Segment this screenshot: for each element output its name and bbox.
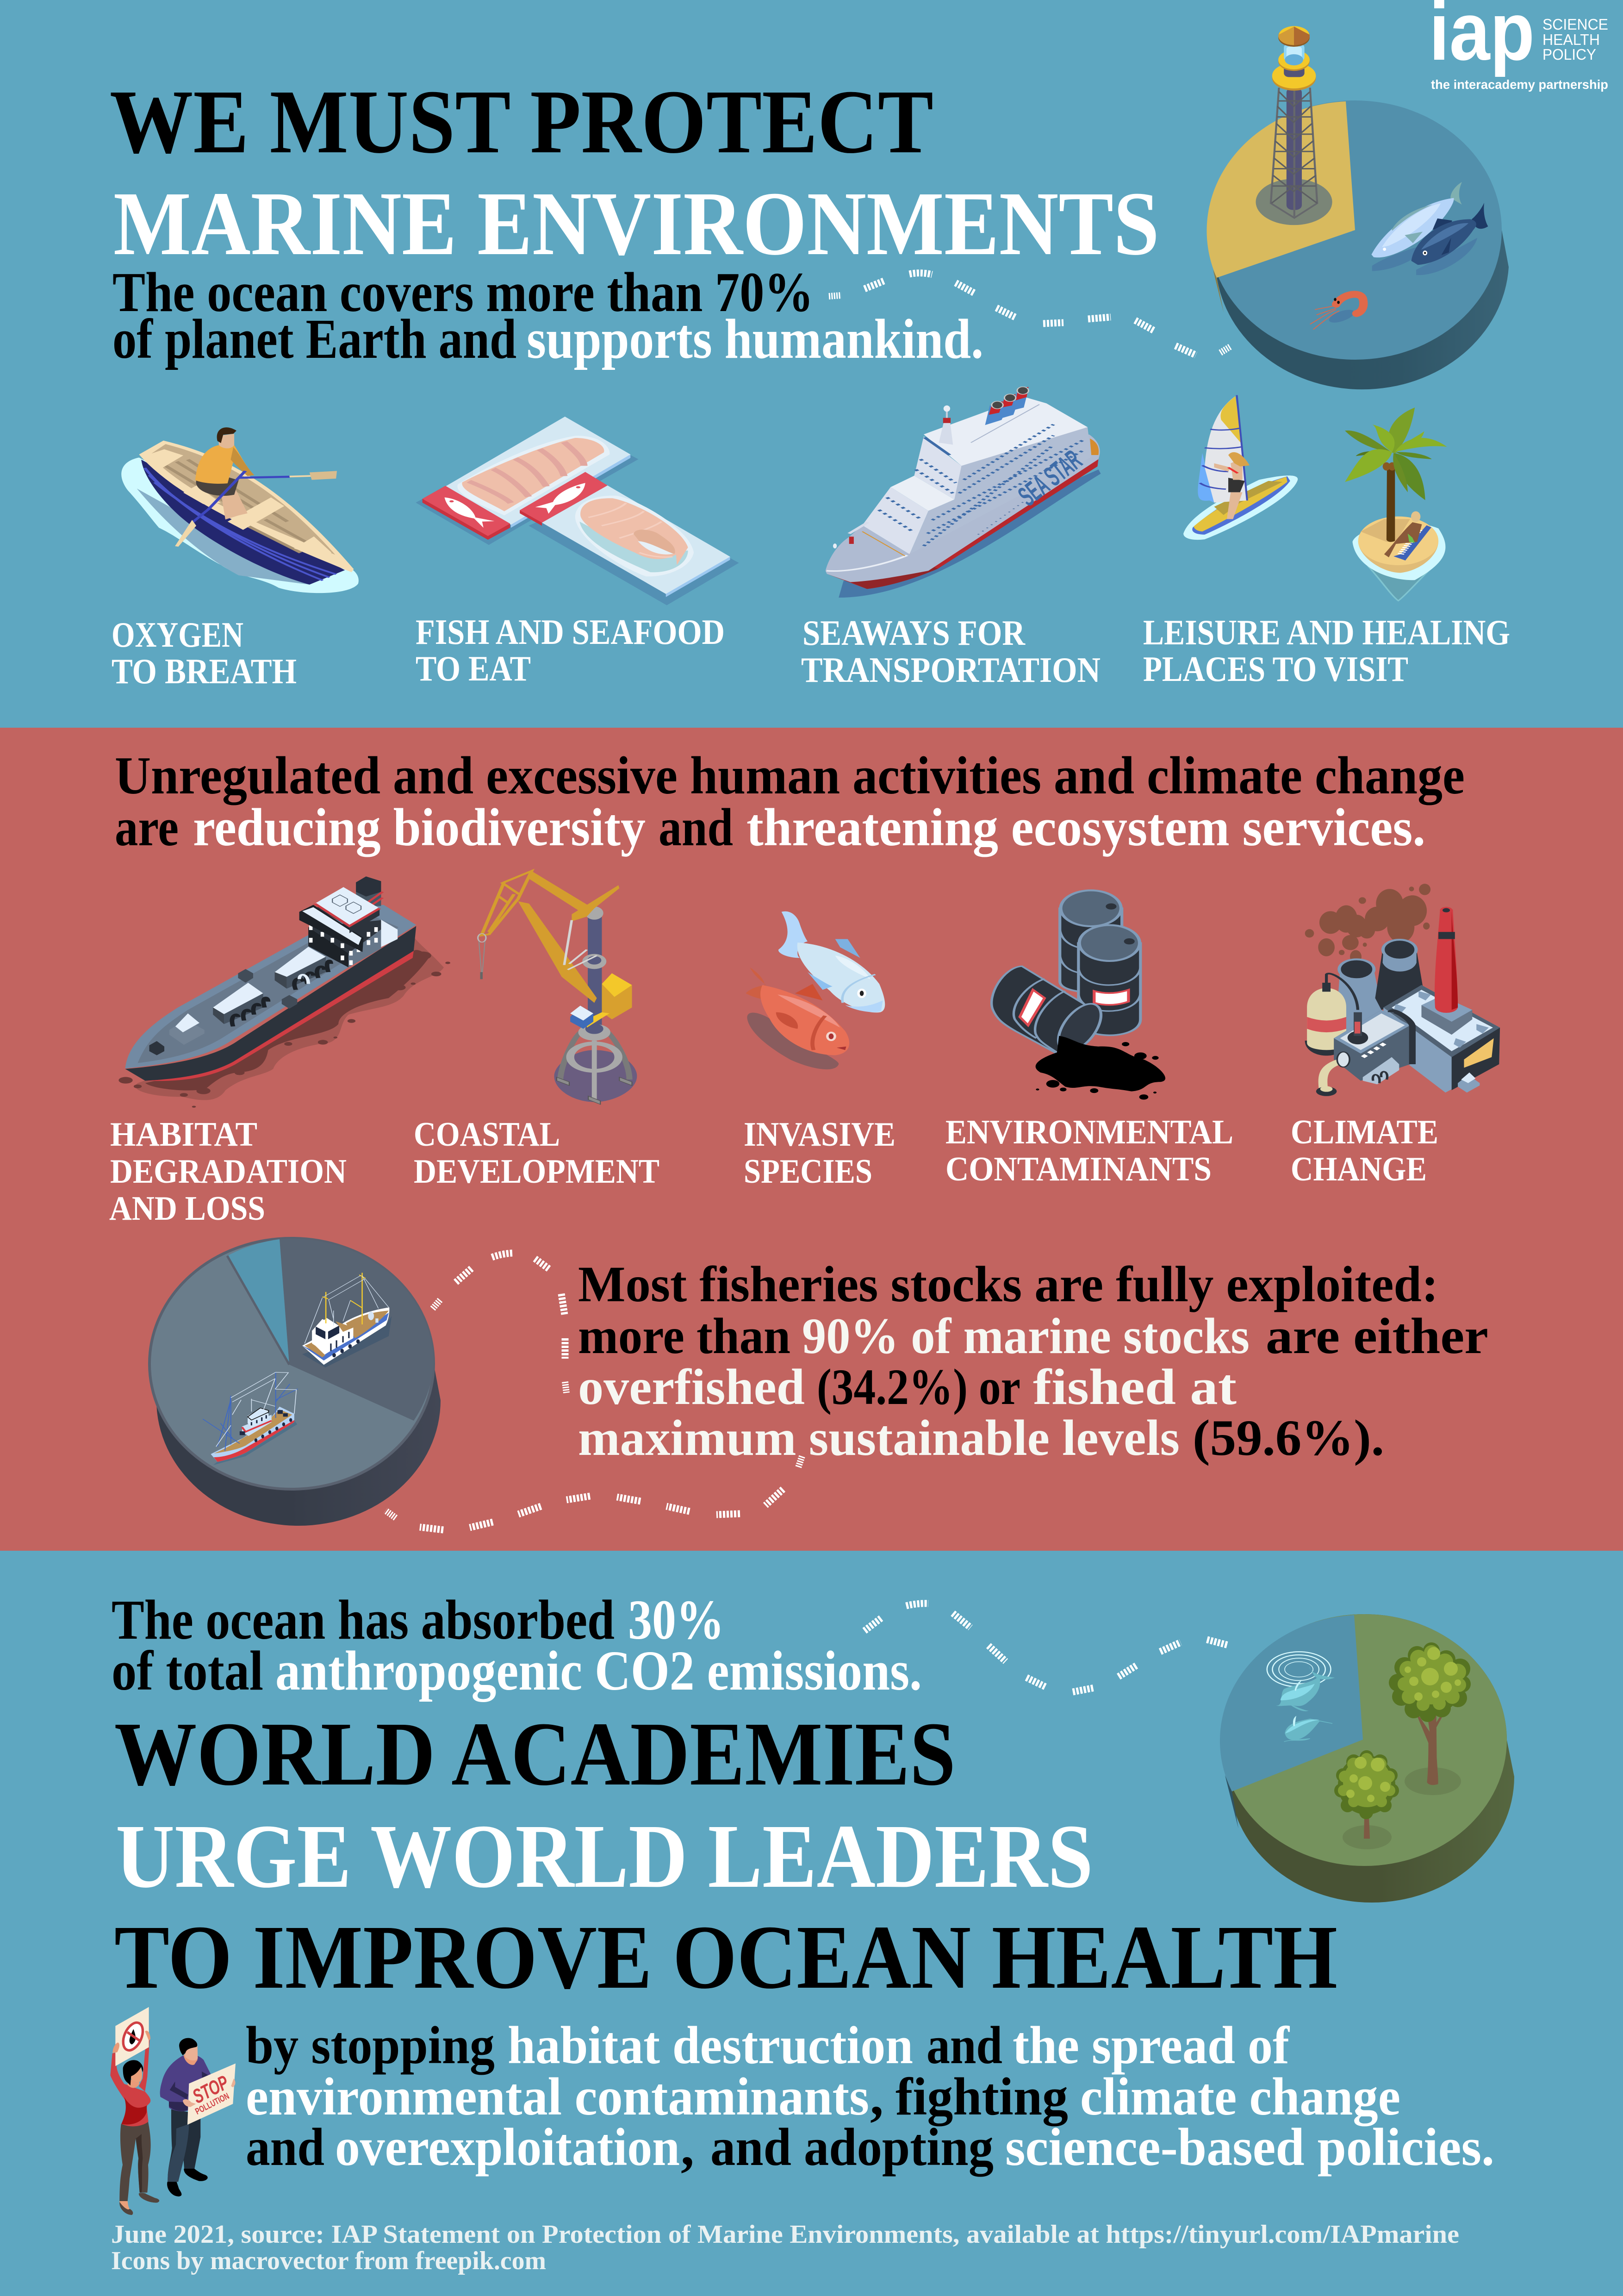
text: fisheries stocks statement: maximum sustainable levels xyxy=(578,1410,1180,1466)
text: ocean coverage statement xyxy=(112,261,983,370)
icon: rowing boat xyxy=(121,427,359,593)
heading: threats statement: and xyxy=(659,798,733,857)
title: to improve ocean health: TO IMPROVE OCEAN HEALTH xyxy=(114,1906,1337,2008)
label: seaways for transportation xyxy=(801,613,1101,690)
label: invasive species: INVASIVE xyxy=(744,1116,895,1154)
footer: source and credits xyxy=(111,2220,1459,2275)
label: oxygen to breath: TO BREATH xyxy=(112,651,297,691)
text: carbon absorption statement: of total xyxy=(112,1640,263,1702)
label: invasive species: SPECIES xyxy=(744,1153,872,1191)
title: we must protect: WE MUST PROTECT xyxy=(110,71,933,172)
heading: threats statement xyxy=(115,746,1465,857)
text: how to improve ocean health: by stopping xyxy=(246,2016,495,2075)
label: fish and seafood to eat: TO EAT xyxy=(416,649,531,688)
icon: invasive fish xyxy=(746,911,885,1069)
text: fisheries stocks statement: overfished xyxy=(578,1359,805,1415)
label: invasive species xyxy=(744,1116,895,1191)
label: oxygen to breath: OXYGEN xyxy=(112,615,243,655)
text: fisheries stocks statement xyxy=(578,1256,1488,1466)
title: world academies: WORLD ACADEMIES xyxy=(114,1703,956,1804)
title: urge world leaders: URGE WORLD LEADERS xyxy=(116,1805,1093,1907)
icon: sea star cruise ship xyxy=(826,387,1101,598)
text: fisheries stocks statement: (59.6%). xyxy=(1193,1410,1384,1466)
text: how to improve ocean health: climate change xyxy=(1080,2067,1400,2127)
label: coastal development: DEVELOPMENT xyxy=(414,1153,659,1191)
logo: iap science health policy: POLICY xyxy=(1542,46,1596,63)
label: oxygen to breath xyxy=(112,615,297,691)
label: leisure and healing places to visit xyxy=(1143,612,1510,689)
text: fisheries stocks statement: (34.2%) or xyxy=(817,1359,1020,1415)
icon: protesters with signs xyxy=(110,2007,236,2215)
label: coastal development: COASTAL xyxy=(414,1116,560,1154)
label: seaways for transportation: TRANSPORTATION xyxy=(801,650,1101,690)
label: fish and seafood to eat: FISH AND SEAFOOD xyxy=(416,612,725,652)
chart: carbon absorption pie xyxy=(1220,1614,1514,1903)
text: fisheries stocks statement: 90% of marine stocks xyxy=(802,1308,1250,1364)
heading: threats statement: reducing biodiversity xyxy=(193,798,646,857)
icon: ripples and dolphins xyxy=(1267,1652,1335,1741)
logo: iap science health policy: the interacademy partnership xyxy=(1431,77,1608,92)
logo: iap science health policy: SCIENCE xyxy=(1542,16,1608,33)
text: fisheries stocks statement: fished at xyxy=(1033,1359,1237,1415)
text: fisheries stocks statement: are either xyxy=(1266,1308,1488,1364)
arrow: dotted path to ocean pie xyxy=(829,273,1230,355)
label: climate change xyxy=(1291,1113,1438,1188)
text: ocean coverage statement: supports humankind. xyxy=(527,308,983,370)
logo: iap science health policy xyxy=(1429,0,1608,92)
icon: small tree xyxy=(1334,1750,1399,1849)
heading: threats statement: threatening ecosystem services. xyxy=(746,798,1425,857)
label: habitat degradation and loss: DEGRADATION xyxy=(110,1153,347,1191)
text: how to improve ocean health: , xyxy=(681,2118,694,2177)
footer: source and credits: Icons by macrovector from freepik.com xyxy=(111,2246,546,2275)
icon: oil barrels and spill xyxy=(992,890,1165,1100)
panel: top ocean section background xyxy=(0,0,1623,728)
text: how to improve ocean health: environmental contaminants xyxy=(246,2067,869,2127)
arrow: dotted path around fisheries text xyxy=(386,1253,802,1530)
text: how to improve ocean health: , xyxy=(870,2067,883,2127)
text: how to improve ocean health xyxy=(246,2016,1494,2177)
footer: source and credits: June 2021, source: IAP Statement on Protection of Marine Environments, available at https://tinyurl.com/IAPmarine xyxy=(111,2220,1459,2249)
icon: fish and seafood trays xyxy=(416,417,739,605)
label: environmental contaminants: CONTAMINANTS xyxy=(945,1150,1212,1188)
label: habitat degradation and loss: HABITAT xyxy=(110,1116,257,1154)
logo: iap science health policy: HEALTH xyxy=(1542,31,1600,48)
label: sea star ship name: SEA STAR xyxy=(1013,444,1088,512)
text: fisheries stocks statement: more than xyxy=(578,1308,790,1364)
text: carbon absorption statement: 30% xyxy=(628,1589,724,1651)
text: ocean coverage statement: of planet Earth and xyxy=(112,308,516,370)
heading: threats statement: are xyxy=(115,798,179,857)
text: how to improve ocean health: and xyxy=(927,2016,1002,2075)
text: how to improve ocean health: overexploitation xyxy=(335,2118,680,2177)
label: fish and seafood to eat xyxy=(416,612,725,688)
chart: ocean pie 70 percent xyxy=(1206,26,1509,389)
icon: fish and shrimp xyxy=(1310,182,1488,330)
label: habitat degradation and loss: AND LOSS xyxy=(109,1190,265,1228)
icon: fishing boat red xyxy=(203,1372,298,1465)
label: habitat degradation and loss xyxy=(109,1116,347,1228)
icon: windsurfer xyxy=(1183,395,1298,540)
label: seaways for transportation: SEAWAYS FOR xyxy=(802,613,1026,653)
text: how to improve ocean health: and xyxy=(246,2118,324,2177)
panel: threats section background xyxy=(0,728,1623,1551)
text: carbon absorption statement: anthropogenic CO2 emissions. xyxy=(275,1640,922,1702)
text: how to improve ocean health: and adopting xyxy=(710,2118,994,2177)
label: coastal development xyxy=(414,1116,659,1191)
text: fisheries stocks statement: Most fisheries stocks are fully exploited: xyxy=(578,1256,1438,1312)
label: environmental contaminants: ENVIRONMENTAL xyxy=(945,1113,1233,1151)
chart: fisheries stocks pie xyxy=(149,1238,441,1526)
icon: oil platform tower xyxy=(1256,26,1332,225)
label: environmental contaminants xyxy=(945,1113,1233,1188)
title: marine environments: MARINE ENVIRONMENTS xyxy=(113,173,1159,274)
label: climate change: CHANGE xyxy=(1291,1150,1427,1188)
icon: tanker with oil spill xyxy=(118,876,450,1108)
text: how to improve ocean health: fighting xyxy=(895,2067,1068,2127)
text: carbon absorption statement: The ocean has absorbed xyxy=(112,1589,615,1651)
panel: bottom call-to-action section background xyxy=(0,1551,1623,2296)
icon: protesters with signs: POLLUTION xyxy=(194,2091,231,2117)
text: how to improve ocean health: the spread of xyxy=(1013,2016,1290,2075)
heading: threats statement: Unregulated and excessive human activities and climate change xyxy=(115,746,1465,805)
label: leisure and healing places to visit: PLACES TO VISIT xyxy=(1143,649,1408,689)
text: how to improve ocean health: habitat destruction xyxy=(508,2016,913,2075)
text: ocean coverage statement: The ocean covers more than 70% xyxy=(112,261,814,324)
icon: polluting factory xyxy=(1305,884,1500,1096)
icon: coastal crane xyxy=(478,871,637,1104)
icon: palm island with sunbather xyxy=(1345,407,1447,601)
icon: tall tree xyxy=(1389,1642,1471,1795)
text: carbon absorption statement xyxy=(112,1589,922,1702)
label: leisure and healing places to visit: LEISURE AND HEALING xyxy=(1143,612,1510,652)
label: climate change: CLIMATE xyxy=(1291,1113,1438,1151)
icon: fishing boat white xyxy=(302,1273,392,1367)
arrow: dotted path to carbon pie xyxy=(864,1603,1228,1692)
icon: protesters with signs: STOP xyxy=(189,2071,232,2108)
text: how to improve ocean health: science-based policies. xyxy=(1005,2118,1494,2177)
